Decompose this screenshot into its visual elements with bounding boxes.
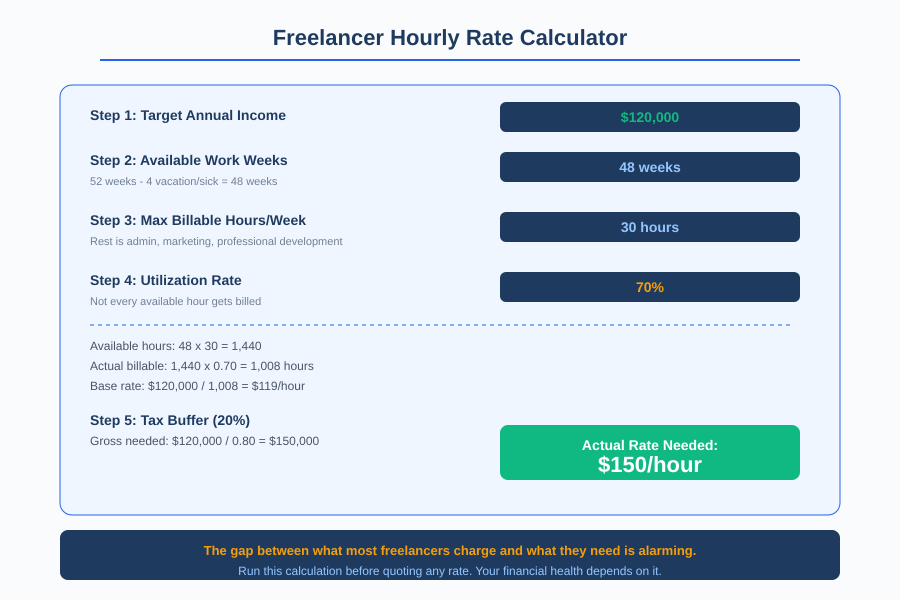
- calculations: Base rate: $120,000 / 1,008 = $119/hour: [90, 379, 305, 393]
- step 4 label: Not every available hour gets billed: [90, 296, 261, 308]
- step 2 value: 48 weeks: [619, 159, 681, 175]
- step 3 value: 30 hours: [621, 219, 679, 235]
- step 3 value: [500, 212, 800, 242]
- step 4 label: [90, 272, 261, 308]
- footer banner: [60, 530, 840, 580]
- step 2 label: Step 2: Available Work Weeks: [90, 152, 288, 168]
- step 3 label: [90, 212, 343, 248]
- step 2 value: [500, 152, 800, 182]
- step 5 label: Gross needed: $120,000 / 0.80 = $150,000: [90, 434, 320, 448]
- step 3 label: Step 3: Max Billable Hours/Week: [90, 212, 306, 228]
- step 4 value: [500, 272, 800, 302]
- step 3 label: Rest is admin, marketing, professional development: [90, 236, 343, 248]
- step 2 label: 52 weeks - 4 vacation/sick = 48 weeks: [90, 176, 278, 188]
- title: Freelancer Hourly Rate Calculator: [273, 25, 628, 50]
- step 5 label: Step 5: Tax Buffer (20%): [90, 412, 250, 428]
- result box: [500, 425, 800, 480]
- step 4 label: Step 4: Utilization Rate: [90, 272, 242, 288]
- step 2 label: [90, 152, 288, 188]
- calculations: [90, 339, 314, 393]
- step 1 label: Step 1: Target Annual Income: [90, 107, 286, 123]
- step 1 value: $120,000: [621, 109, 679, 125]
- footer banner: The gap between what most freelancers charge and what they need is alarming.: [204, 543, 696, 558]
- step 5 label: [90, 412, 320, 448]
- calculations: Actual billable: 1,440 x 0.70 = 1,008 hours: [90, 359, 314, 373]
- calculations: Available hours: 48 x 30 = 1,440: [90, 339, 262, 353]
- panel: calculator: [60, 85, 840, 515]
- step 1 value: [500, 102, 800, 132]
- panel background: [60, 85, 840, 515]
- result box: Actual Rate Needed:: [582, 437, 718, 453]
- step 4 value: 70%: [636, 279, 665, 295]
- footer banner: Run this calculation before quoting any rate. Your financial health depends on it.: [238, 564, 662, 578]
- result box: $150/hour: [598, 452, 702, 477]
